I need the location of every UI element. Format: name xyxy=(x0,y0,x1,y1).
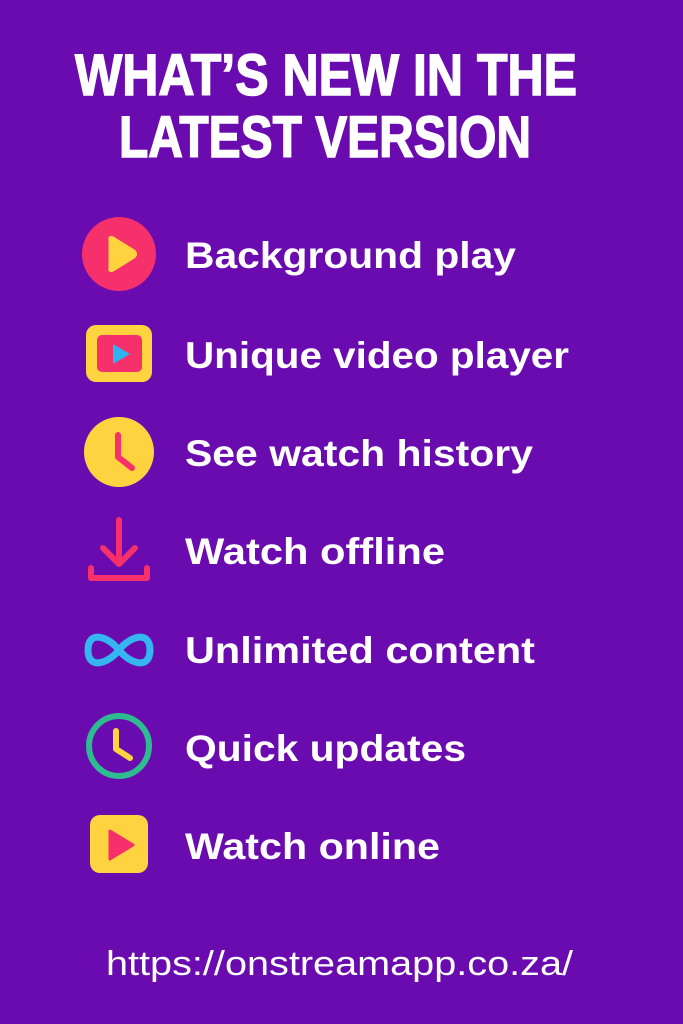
feature: see watch history: See watch history xyxy=(185,433,533,474)
feature: unlimited content: Unlimited content xyxy=(185,630,535,671)
icon: green clock xyxy=(89,716,149,776)
feature: watch online xyxy=(90,815,440,873)
feature: watch online: Watch online xyxy=(185,826,440,867)
title: WHAT’S NEW IN THE xyxy=(75,43,577,108)
feature: see watch history xyxy=(84,417,533,487)
icon: yellow clock xyxy=(84,417,154,487)
feature: quick updates xyxy=(89,716,466,776)
icon: video player xyxy=(86,325,152,382)
icon: infinity xyxy=(88,637,150,663)
feature: watch offline: Watch offline xyxy=(185,531,445,572)
icon: play square xyxy=(90,815,148,873)
icon: play circle xyxy=(82,217,156,291)
feature: unlimited content xyxy=(88,630,535,671)
title: LATEST VERSION xyxy=(119,105,531,170)
feature: watch offline xyxy=(91,520,445,578)
url footer: https://onstreamapp.co.za/ xyxy=(106,945,574,983)
feature: background play: Background play xyxy=(185,235,516,276)
feature: quick updates: Quick updates xyxy=(185,728,466,769)
feature: background play xyxy=(82,217,516,291)
title xyxy=(75,43,577,170)
feature: unique video player: Unique video player xyxy=(185,335,569,376)
icon: download xyxy=(91,520,147,578)
feature: unique video player xyxy=(86,325,569,382)
